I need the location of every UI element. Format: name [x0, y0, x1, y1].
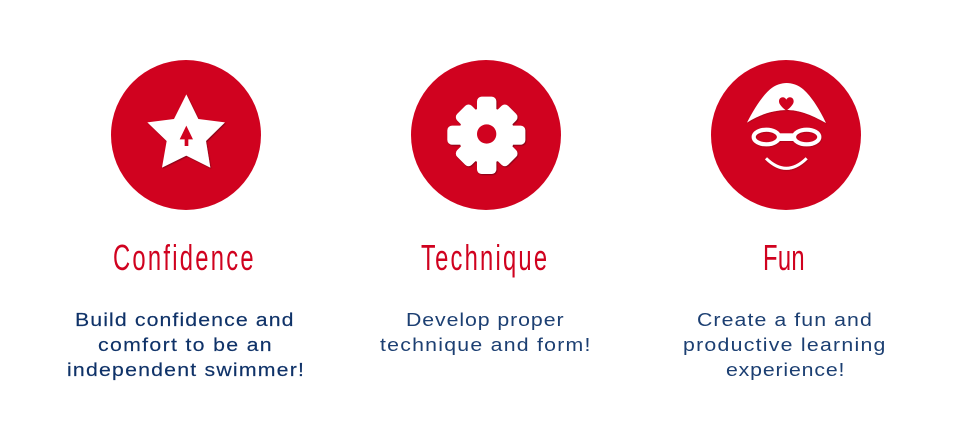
panel: fun [683, 60, 885, 381]
text: confidence description: independent swimmer! [67, 360, 304, 381]
text: technique description: Develop proper [406, 310, 564, 331]
heading: confidence: Confidence [113, 238, 254, 278]
icon: gear badge [411, 60, 561, 210]
text: fun description: productive learning [683, 335, 885, 356]
text: confidence description: Build confidence and [75, 310, 293, 331]
text: technique description [380, 310, 590, 356]
text: fun description [683, 310, 885, 381]
heading: technique: Technique [421, 238, 547, 278]
text: confidence description: comfort to be an [98, 335, 272, 356]
icon: swimmer face badge [711, 60, 861, 210]
panel: confidence [67, 60, 304, 381]
text: fun description: Create a fun and [697, 310, 872, 331]
panel: technique [380, 60, 590, 356]
text: technique description: technique and form! [380, 335, 590, 356]
icon: star badge [111, 60, 261, 210]
heading: fun: Fun [763, 238, 805, 278]
text: confidence description [67, 310, 304, 381]
text: fun description: experience! [726, 360, 844, 381]
